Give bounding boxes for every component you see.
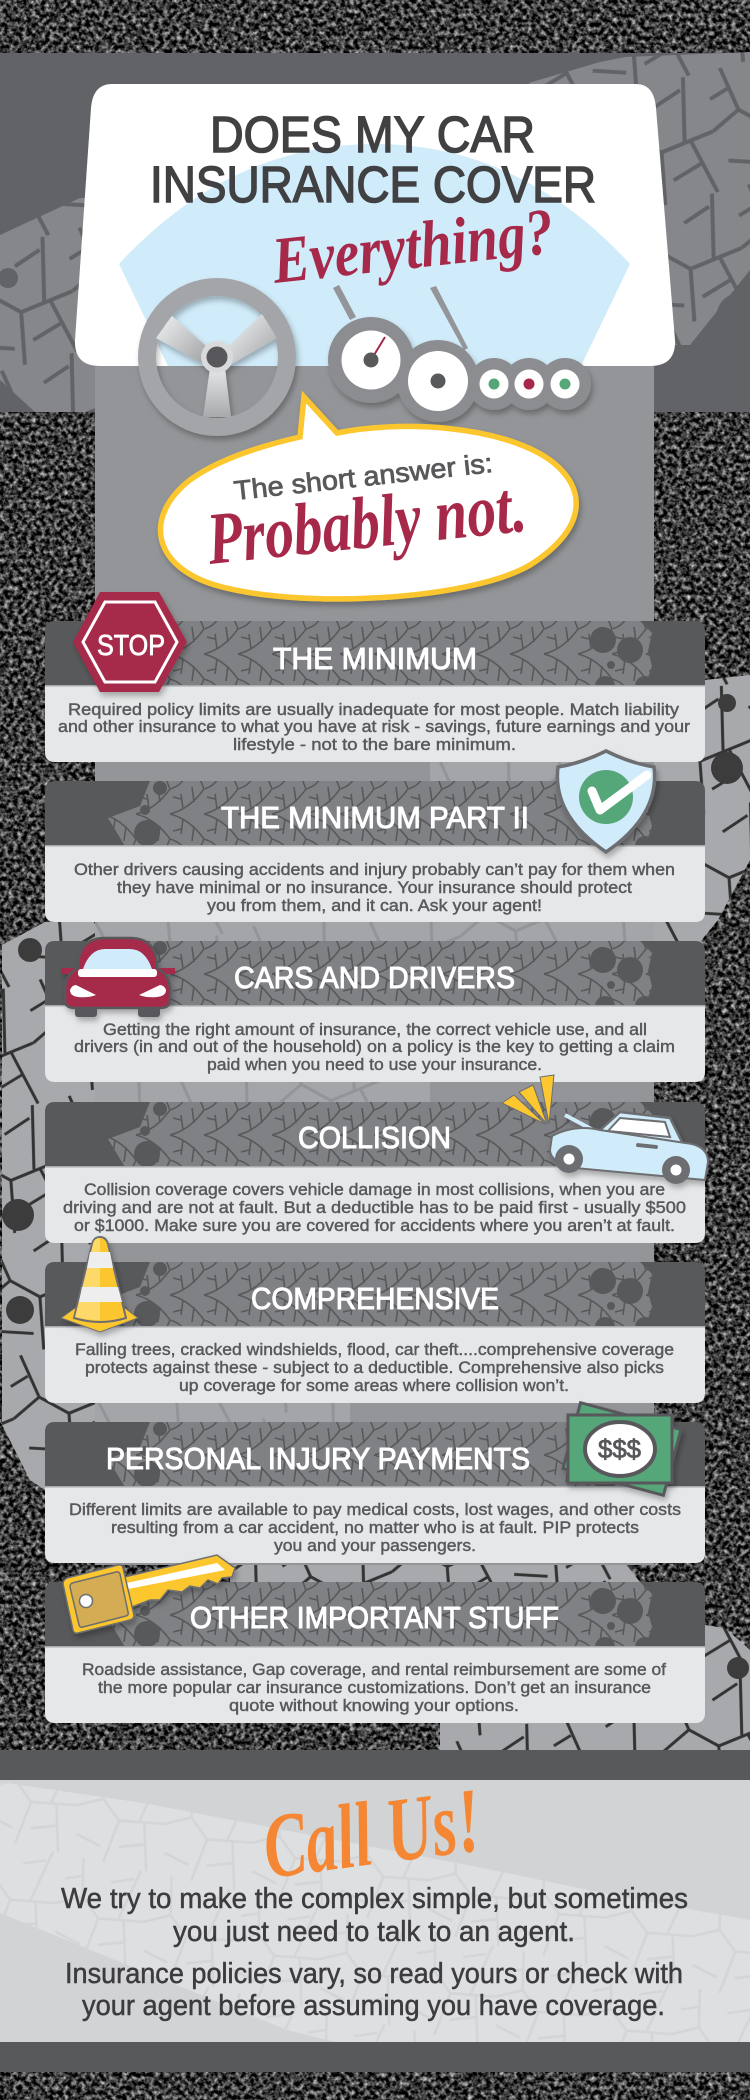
tire tracks on column	[95, 762, 654, 1422]
top grey band	[0, 53, 750, 412]
icon: stop sign: STOP	[97, 630, 165, 662]
heading: cars and drivers: CARS AND DRIVERS	[234, 960, 515, 995]
icon: money bills: $$$	[598, 1434, 642, 1464]
text: cars and drivers: paid when you need to use your insurance.	[207, 1055, 542, 1074]
text: personal injury payments	[69, 1500, 681, 1555]
title: DOES MY CAR	[210, 106, 535, 163]
icon: stop sign	[73, 592, 187, 692]
heading: the minimum: THE MINIMUM	[273, 641, 477, 676]
tire track watermark	[0, 1782, 750, 2042]
heading: personal injury payments: PERSONAL INJURY PAYMENTS	[106, 1441, 530, 1476]
heading: collision: COLLISION	[298, 1120, 451, 1155]
icon: crashed car	[550, 1112, 708, 1184]
icon: crash burst	[502, 1075, 554, 1124]
text: call to action	[61, 1883, 688, 2022]
windshield panel	[75, 84, 675, 366]
heading: other important stuff: OTHER IMPORTANT STUFF	[190, 1600, 559, 1635]
icon: wipers	[333, 285, 468, 350]
icon: key	[63, 1555, 235, 1633]
heading: the minimum part II: THE MINIMUM PART II	[221, 800, 529, 835]
icon: dashboard gauges	[328, 317, 591, 422]
panel: collision	[45, 1075, 708, 1243]
text: comprehensive: up coverage for some areas where collision won’t.	[179, 1376, 569, 1395]
text: the minimum part II: you from them, and it can. Ask your agent!	[207, 896, 542, 915]
text: the minimum part II: they have minimal or no insurance. Your insurance should protect	[117, 878, 632, 897]
icon: shield with check	[557, 751, 655, 852]
text: cars and drivers: Getting the right amount of insurance, the correct vehicle use, and all	[103, 1020, 647, 1039]
text: comprehensive	[75, 1340, 674, 1395]
text: the minimum part II: Other drivers causing accidents and injury probably can’t pay for them when	[74, 860, 675, 879]
text: the minimum: Required policy limits are usually inadequate for most people. Match liability	[68, 700, 680, 719]
text: call to action: you just need to talk to an agent.	[173, 1916, 575, 1948]
text: other important stuff: the more popular car insurance customizations. Don’t get an insurance	[98, 1678, 651, 1697]
subtitle: everything: Everything?	[268, 195, 557, 298]
text: personal injury payments: you and your passengers.	[274, 1536, 476, 1555]
text: call to action: your agent before assuming you have coverage.	[82, 1990, 665, 2022]
panel: the minimum	[45, 592, 705, 762]
icon: steering wheel	[138, 278, 296, 436]
text: the minimum part II	[74, 860, 675, 915]
text: collision: driving and are not at fault. But a deductible has to be paid first - usually $500	[63, 1198, 686, 1217]
panel: other important stuff	[45, 1555, 705, 1723]
panel: the minimum part II	[45, 751, 705, 922]
text: cars and drivers	[74, 1020, 675, 1074]
icon: traffic cone	[61, 1237, 138, 1332]
text: personal injury payments: Different limits are available to pay medical costs, lost wages, and other costs	[69, 1500, 681, 1519]
speech bubble	[160, 397, 576, 599]
footer band	[0, 1750, 750, 2072]
speech bubble: Probably not.	[202, 466, 530, 581]
tire tracks on top band	[0, 52, 750, 412]
text: the minimum	[58, 700, 690, 754]
text: comprehensive: protects against these - subject to a deductible. Comprehensive also picks	[85, 1358, 664, 1377]
text: other important stuff	[82, 1660, 666, 1715]
heading: comprehensive: COMPREHENSIVE	[251, 1281, 499, 1316]
text: the minimum: and other insurance to what you have at risk - savings, future earnings and your	[58, 717, 690, 736]
heading: call us: Call Us!	[257, 1768, 487, 1898]
title	[150, 106, 596, 213]
text: personal injury payments: resulting from a car accident, no matter who is at fault. PIP protects	[111, 1518, 639, 1537]
text: call to action: We try to make the complex simple, but sometimes	[61, 1883, 688, 1915]
icon: money bills	[563, 1403, 681, 1495]
panel: personal injury payments	[45, 1403, 705, 1563]
panel: comprehensive	[45, 1237, 705, 1403]
central grey column	[95, 366, 654, 1565]
text: collision: or $1000. Make sure you are covered for accidents where you aren’t at fault.	[74, 1216, 675, 1235]
icon: red car	[61, 938, 175, 1017]
panel: call to action	[0, 1768, 750, 2042]
text: the minimum: lifestyle - not to the bare minimum.	[233, 735, 516, 754]
text: comprehensive: Falling trees, cracked windshields, flood, car theft....comprehensive coverage	[75, 1340, 674, 1359]
text: call to action: Insurance policies vary, so read yours or check with	[65, 1958, 683, 1990]
text: other important stuff: Roadside assistance, Gap coverage, and rental reimbursement are some of	[82, 1660, 666, 1679]
text: cars and drivers: drivers (in and out of the household) on a policy is the key to getting a claim	[74, 1037, 675, 1056]
speech bubble: The short answer is:	[232, 448, 494, 506]
text: collision: Collision coverage covers vehicle damage in most collisions, when you are	[84, 1180, 665, 1199]
tire tracks on asphalt	[2, 675, 750, 1750]
title: INSURANCE COVER	[150, 156, 596, 213]
text: collision	[63, 1180, 686, 1235]
text: other important stuff: quote without knowing your options.	[229, 1696, 519, 1715]
panel: cars and drivers	[45, 938, 705, 1082]
